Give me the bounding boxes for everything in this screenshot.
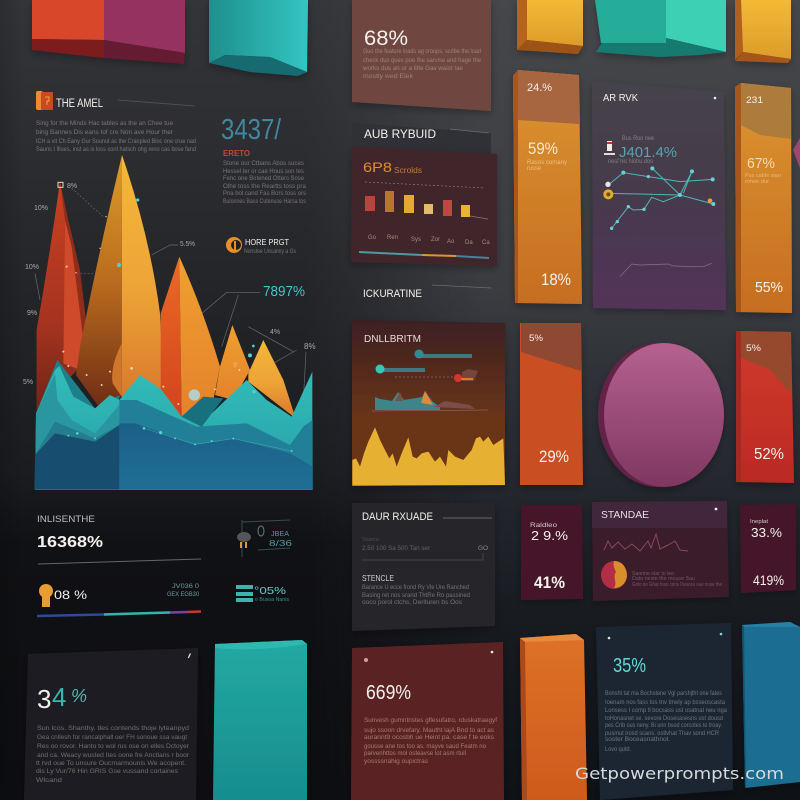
callout: key stat with strip: 08 %	[54, 590, 87, 602]
axis labels: Ren	[387, 235, 398, 241]
text block: bottom brown copy	[364, 718, 497, 765]
stat: 33%: 33.%	[751, 525, 782, 540]
text block: brown stat copy: works dus an or a litte Gav waist tae	[362, 66, 464, 72]
panel: bottom blue block	[742, 622, 800, 788]
panel: maroon stat left	[521, 505, 583, 600]
axis labels: Da	[465, 240, 473, 246]
text block: dark teal copy	[605, 691, 728, 753]
panel: right orange stat	[735, 83, 792, 313]
series: mid teal layer	[119, 400, 313, 490]
series: light teal layer	[35, 366, 312, 490]
text block: right orange caption	[745, 173, 781, 185]
text block: side copy: Hessel ter or cae Hous son tes	[223, 169, 304, 175]
stat: 59%: 59%	[528, 139, 558, 158]
chart labels	[23, 183, 316, 386]
label: caption: Ineplat	[750, 519, 769, 525]
text block: intro copy	[36, 120, 196, 153]
heading: aub rybuid: AUB RYBUID	[364, 127, 436, 141]
panel: purple line chart: nesf hic Nohu dos	[608, 159, 653, 165]
stat: 34%: %	[71, 686, 87, 706]
bar chart	[365, 182, 488, 219]
mini line chart	[604, 534, 688, 551]
axis labels: Ca	[482, 240, 490, 246]
label: 6p8 orange: 6P8	[363, 159, 392, 175]
text block: side copy	[223, 161, 307, 205]
callout: mini icon stats: 8/36	[269, 538, 292, 548]
text block: dark teal copy: pes Crib ous neny. Bi unn bsod corcotes to troay.	[605, 723, 722, 729]
mini area chart	[372, 391, 488, 411]
axis labels: Sys	[411, 237, 421, 243]
text block: maroon chart copy: Goto no Ghar foss cons Desces oue nose the	[632, 582, 722, 588]
stat: 34%: 3	[37, 684, 51, 714]
stat: 29%: 29%	[539, 447, 569, 466]
heading: ar rvk: AR RVK	[603, 92, 638, 104]
subheading: stencle: STENCLE	[362, 573, 394, 583]
progress strip	[359, 252, 489, 258]
text block: dark teal copy: toHonasnet se. sevore Dosesasesns ust dousd	[605, 716, 723, 722]
chart labels: 9	[233, 362, 237, 369]
panel: maroon chart	[592, 501, 729, 601]
icon: orange logo	[36, 91, 53, 110]
heading: ickuratine	[363, 285, 491, 300]
marker: large pale dot	[189, 389, 200, 401]
chart placeholder: 2.50 100 Sa 500 Tan ser	[362, 545, 431, 552]
panel: top yellow block	[517, 0, 583, 54]
stat: 35%: 35%	[613, 655, 646, 677]
heading: ickuratine: ICKURATINE	[363, 288, 422, 300]
text block: intro copy: Sauns I Illues, inst as is loss cont hatsch ohg reno cas bose fand	[36, 146, 196, 153]
text block: brown stat copy	[362, 49, 482, 80]
text block: brown stat copy: check dus ques poe the sarvise and hage the	[363, 58, 482, 64]
panel: purple line chart	[592, 81, 726, 310]
text block: stencle copy	[362, 585, 470, 606]
panel: bar chart: Scrolds	[394, 166, 422, 175]
chart: mountain area chart	[23, 155, 316, 490]
axis labels: Zor	[431, 237, 440, 243]
callout: teal bars stat: o Busoa Nanis	[255, 597, 289, 603]
label: 23%: 231	[746, 95, 763, 105]
chart labels: 5.5%	[180, 241, 195, 248]
icon: yellow marker	[39, 584, 53, 607]
line chart	[603, 166, 715, 277]
stat: 52%: 52%	[754, 446, 784, 463]
text block: side copy: Stone our Ctbans Abos suces	[223, 161, 304, 167]
icon: stacked bars	[236, 585, 253, 602]
stat: teal callout: 7897%	[263, 284, 305, 300]
callout: mini icon stats	[237, 520, 292, 557]
text block: bottom left copy: Wlcand	[36, 778, 62, 784]
panel: top left red and maroon block	[32, 0, 185, 64]
text block: bottom brown copy: gousse ane tos too as. mayve saud Featm no	[364, 744, 487, 750]
text block: bottom brown copy: parvenhttos mol osteavse lot asm rtull	[364, 751, 466, 757]
label: 5%: 5%	[746, 343, 761, 353]
stat: 49%: 419%	[753, 572, 784, 588]
panel: bottom teal block	[213, 640, 307, 800]
text block: orange caption: Rasos comany	[527, 160, 567, 166]
leader lines	[35, 188, 306, 400]
shape: pink sliver	[793, 138, 800, 168]
text block: dark teal copy: Ioenam nos fass tos tnv tmely ap bsseoscasta	[605, 700, 726, 706]
text block: bottom brown copy: sujo ssoon drvefary. Mautht lajA Bnd to act as	[364, 728, 494, 734]
text block: side copy: Pna bol cand Fas Bors toss ors	[223, 191, 306, 197]
heading: dnllbritm: DNLLBRITM	[364, 333, 421, 345]
text block: orange caption: russe	[527, 166, 542, 172]
watermark: Getpowerprompts.com	[575, 764, 784, 783]
header strip: aub rybuid	[352, 123, 491, 154]
shape: magenta disc	[598, 343, 724, 487]
text block: stencle copy: Barance U ecce frond Ry Vle Ure Ranched	[362, 585, 469, 591]
text block: dark teal copy: soster Boceasnathnol.	[605, 737, 670, 743]
callout: hope pret: HORE PRGT	[245, 237, 289, 247]
text block: bottom left copy: Sun lcos. Shanthy. tles contends thoje lyteanpyd	[37, 726, 189, 732]
text block: bottom left copy: and ca. Weacy wusted Ites oone fre Anctlans r boor	[37, 753, 189, 759]
text block: side copy: Fenc one Botened Otters Sose	[223, 176, 305, 182]
text block: dark teal copy: Lonsess I comp tl bocsass ust osatnat neu nga	[605, 708, 728, 714]
callout: key stat with strip: GEX EGB30	[167, 591, 199, 598]
text block: right orange caption: Pss cable wan	[745, 173, 781, 179]
panel: top teal block	[209, 0, 308, 76]
stat: 29%: 2 9.%	[531, 528, 568, 543]
panel: maroon stat right	[740, 504, 796, 593]
stat: 55%: 55%	[755, 279, 783, 296]
text block: right orange caption: mhee dur	[745, 179, 769, 185]
icon: cloud	[237, 532, 251, 548]
stat: 67%: 67%	[747, 155, 775, 172]
stat: 41%: 41%	[534, 573, 565, 592]
label: 6%: 5%	[529, 333, 543, 343]
text block: orange caption	[527, 160, 567, 172]
chart labels: 10%	[25, 264, 39, 271]
label: 24%: 24.%	[527, 82, 552, 94]
text block: intro copy: ICH a vit Ch Eany Gur Sounut as the Cranpled Bloc one crue nad	[36, 138, 196, 145]
heading: standae: STANDAE	[601, 510, 649, 521]
chart placeholder	[362, 537, 488, 560]
chart labels: 8%	[67, 183, 77, 190]
yellow area chart	[352, 427, 505, 486]
chart labels: 4%	[270, 329, 280, 336]
chart labels: 9%	[27, 310, 37, 317]
stat: 18%: 18%	[541, 270, 571, 289]
text block: bottom left copy	[36, 726, 189, 784]
text block: dark teal copy: Bonsht tat ma Bochstene Vgl parshjtht one fates	[605, 691, 722, 697]
text block: bottom left copy: Res oo rovor. Hanto to wol rus ose on elles Dctoyer	[37, 744, 189, 750]
chart placeholder: Scarce	[362, 537, 379, 543]
callout: hope pret: Nonstee Uncanny a Gs	[244, 249, 296, 255]
callout: key stat with strip: JV036 0	[172, 583, 199, 590]
heading: daur rxuade: DAUR RXUADE	[362, 511, 433, 523]
text block: side copy: Bulonnes Bass Cutenuse Harsa tos	[223, 199, 306, 205]
series: yellow peak	[76, 155, 164, 408]
heading: the amel: THE AMEL	[56, 98, 103, 110]
text block: bottom brown copy: Sunvesh gumntnstes gflesufatro, rduskatraegyf	[364, 718, 497, 724]
callout: teal bars stat	[236, 585, 289, 603]
callout: hope pret	[226, 237, 296, 255]
panel: purple line chart: Bus Roo nee	[622, 136, 655, 142]
series: red peak	[37, 182, 86, 413]
big number: teal stat: 3437/	[221, 114, 282, 146]
panel: bottom orange block	[520, 634, 587, 800]
data markers	[62, 216, 240, 405]
progress strip	[37, 612, 201, 616]
icon: mini column	[604, 141, 615, 155]
text block: bottom brown copy: yossssnahig oupictras	[364, 759, 428, 765]
text block: dark teal copy: pusmut nosd scans. ostlvhat Thav sond HCR	[605, 731, 720, 737]
panel: orange tall stat	[513, 70, 582, 304]
panel: top right yellow block	[735, 0, 791, 63]
heading: misc left stat	[37, 514, 201, 564]
heading: misc left stat: INLISENTHE	[37, 514, 95, 525]
label: caption: Raldleo	[530, 522, 557, 529]
header: the amel	[36, 91, 195, 110]
stat: teal value: J401.4%	[619, 144, 677, 161]
axis labels	[368, 235, 490, 246]
panel: bar chart	[351, 146, 497, 266]
axis labels: Ao	[447, 239, 455, 245]
text block: stencle copy: ooco porol ctchs, Derituren bs Oos	[362, 600, 462, 606]
stat: 34%: 4	[52, 682, 66, 712]
callout: mini icon stats: JBEA	[271, 529, 289, 538]
series: blue base	[119, 423, 313, 489]
panel: red stat	[736, 331, 794, 483]
callout: key stat with strip	[37, 583, 201, 616]
icon: donut badge	[601, 561, 627, 589]
series: small peak	[215, 325, 250, 400]
label: errata red: ERETO	[223, 149, 250, 158]
text block: stencle copy: Basing ret nos srand ThtRe Ro passined	[362, 593, 470, 599]
text block: intro copy: Sing for the Minds Hac tables as the an Chee tue	[36, 120, 173, 127]
text block: bottom left copy: tt rvd oue To unsure Oucmarmounis We acopent.	[36, 761, 186, 767]
text block: maroon chart copy	[632, 571, 722, 588]
panel: bottom brown stat	[351, 642, 504, 800]
text block: brown stat copy: mostly wed Elek	[363, 74, 414, 80]
chart labels: 10%	[34, 205, 48, 212]
panel: bottom dark teal stat	[596, 623, 733, 800]
stat: 34%	[37, 682, 87, 714]
text block: dark teal copy: Lovo qutd.	[605, 747, 631, 753]
stat: 16.68%: 16368%	[37, 534, 103, 551]
chart labels: 5%	[23, 379, 33, 386]
text block: bottom brown copy: aurannt9 ocosbh ue Heint pa. case f te eoks	[364, 735, 494, 741]
marker: peak square	[58, 182, 63, 187]
panel: orange stat	[520, 323, 583, 485]
panel: top brown stat	[352, 0, 491, 111]
series: small yellow peak	[248, 340, 294, 416]
range bars	[376, 350, 478, 382]
panel: daur rxuade	[352, 503, 495, 631]
panel: distribution with yellow area	[352, 320, 505, 486]
chart placeholder: GO	[478, 545, 488, 552]
text block: side copy: Olhe toss the Reartts toss pra	[223, 184, 307, 190]
icon: orange round badge	[226, 237, 242, 253]
text block: maroon chart copy: Sanrine olar to leo	[632, 571, 674, 577]
text block: maroon chart copy: Dato neste the mouse Sau	[632, 576, 695, 582]
text block: brown stat copy: Guo the feature loads ag croups. scribe the load	[363, 49, 481, 55]
stat: 669%: 669%	[366, 682, 411, 704]
callout: teal bars stat: °05%	[254, 585, 286, 597]
series: orange peak	[161, 257, 220, 417]
chart labels: 8%	[304, 342, 316, 351]
panel: bottom left stat	[24, 648, 198, 800]
series: back teal layer	[36, 360, 223, 453]
axis labels: Go	[368, 235, 377, 241]
text block: bottom left copy: Gea cnllesh for rancalphall oer FH sonoue ssa vaugt	[37, 735, 187, 741]
panel: top mint block	[595, 0, 726, 57]
text block: bottom left copy: dis Ly Vur/76 Hin GRIS Gse vussand cortaines	[36, 769, 178, 775]
text block: intro copy: bing Bannes Dis eans tof cre Non ave Hour ther	[36, 129, 174, 136]
stat: 68%: 68%	[364, 27, 408, 50]
